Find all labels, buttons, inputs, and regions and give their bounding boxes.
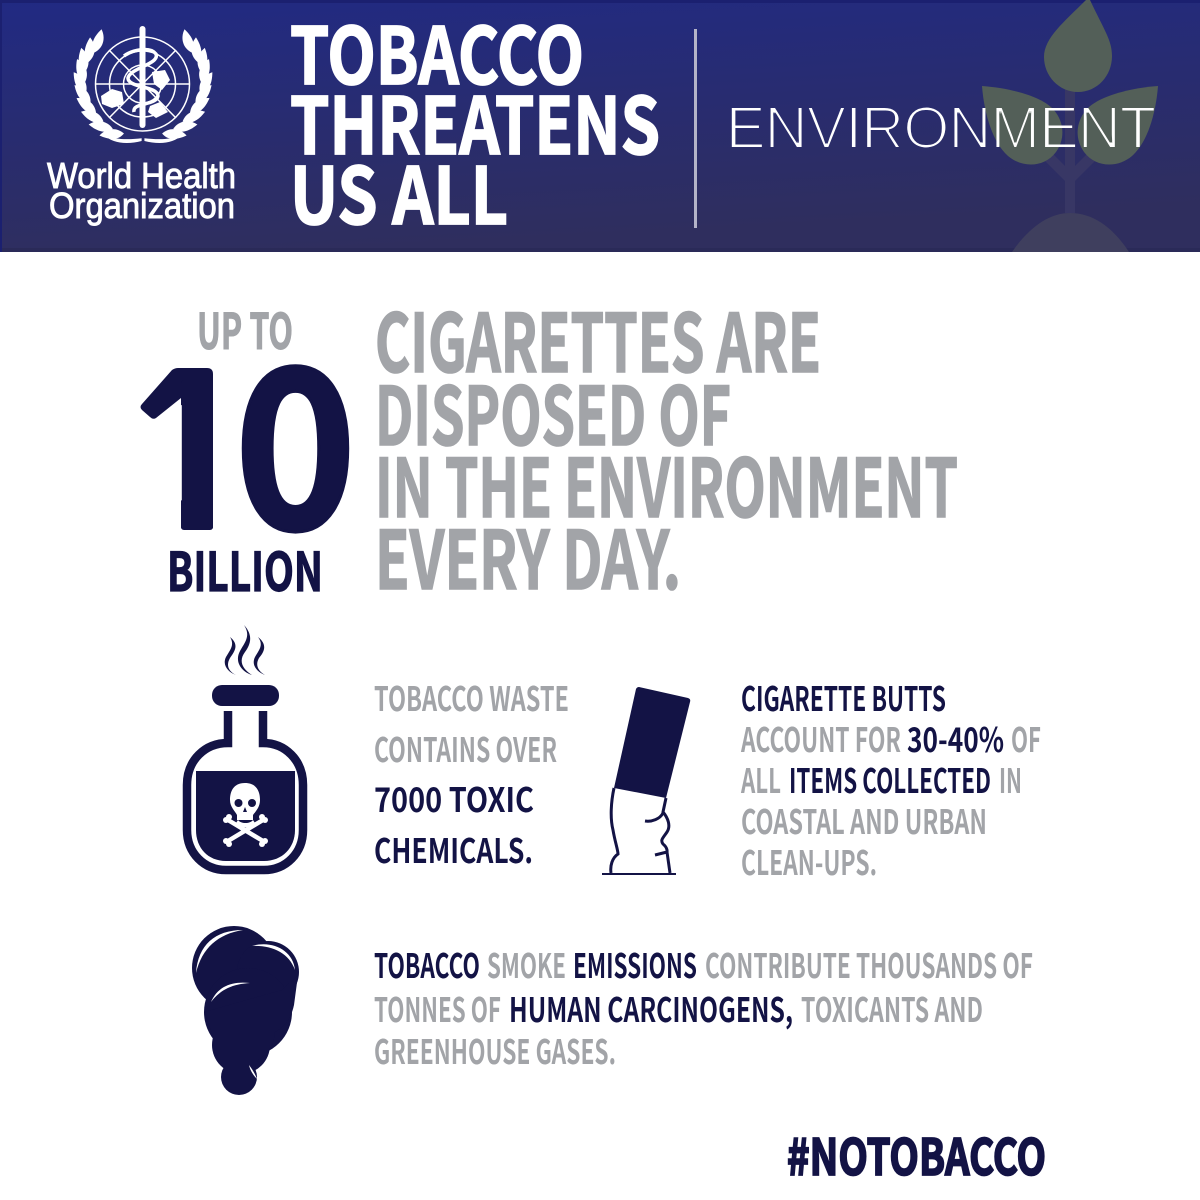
header banner — [0, 0, 1200, 252]
statistic: 10 billion — [140, 312, 350, 592]
text: cigarette butts: ALL — [740, 754, 781, 803]
text: cigarette butts — [740, 672, 1041, 885]
divider — [694, 29, 697, 228]
text: cigarette butts: COASTAL AND URBAN — [741, 795, 987, 844]
headline: CIGARETTES ARE — [375, 280, 821, 396]
text: toxic chemicals — [374, 672, 569, 873]
steam — [225, 625, 265, 675]
icon: WHO emblem — [74, 26, 213, 143]
skull and crossbones — [223, 783, 268, 847]
numeral 10 — [140, 364, 350, 534]
text: cigarette butts: OF — [1011, 713, 1041, 762]
text: toxic chemicals: TOBACCO WASTE — [374, 672, 569, 721]
headline: DISPOSED OF — [375, 353, 731, 469]
text: smoke emissions: EMISSIONS — [573, 939, 697, 988]
icon: poison bottle — [187, 625, 303, 870]
text: smoke emissions: TOBACCO — [374, 939, 480, 988]
icon: cigarette butt — [602, 687, 690, 875]
logo wordmark: World Health — [47, 155, 236, 196]
text: smoke emissions: CONTRIBUTE THOUSANDS OF — [705, 939, 1033, 988]
hashtag: #NOTOBACCO — [787, 1118, 1046, 1190]
statistic: 10 billion: BILLION — [167, 531, 323, 607]
text: cigarette butts: ACCOUNT FOR — [740, 713, 901, 762]
logo wordmark: Organization — [49, 185, 235, 226]
headline — [375, 280, 958, 613]
text: smoke emissions — [374, 939, 1033, 1074]
title: US ALL — [290, 135, 508, 247]
text: smoke emissions: GREENHOUSE GASES. — [374, 1025, 616, 1074]
text: cigarette butts: ITEMS COLLECTED — [789, 754, 991, 803]
text: smoke emissions: SMOKE — [487, 939, 566, 988]
text: smoke emissions: TONNES OF — [374, 983, 501, 1032]
section label: ENVIRONMENT — [726, 95, 1156, 161]
title: THREATENS — [290, 65, 660, 177]
WHO logo — [47, 26, 236, 226]
statistic: 10 billion: UP TO — [197, 293, 293, 364]
text: cigarette butts: CIGARETTE BUTTS — [741, 672, 946, 721]
text: toxic chemicals: CHEMICALS. — [374, 824, 533, 873]
text: toxic chemicals: CONTAINS OVER — [374, 723, 557, 772]
icon: plant — [982, 0, 1158, 252]
icon: smoke cloud — [192, 926, 299, 1095]
text: cigarette butts: IN — [999, 754, 1022, 803]
text: cigarette butts: 30-40% — [907, 713, 1004, 762]
text: toxic chemicals: 7000 TOXIC — [374, 773, 534, 822]
text: smoke emissions: HUMAN CARCINOGENS, — [509, 983, 793, 1032]
text: cigarette butts: CLEAN-UPS. — [741, 836, 877, 885]
title — [290, 0, 660, 247]
text: smoke emissions: TOXICANTS AND — [801, 983, 983, 1032]
headline: EVERY DAY. — [375, 497, 681, 613]
numeral 10: 0 — [234, 271, 357, 593]
numeral 10: 1 — [136, 271, 252, 593]
logo wordmark — [47, 155, 236, 226]
